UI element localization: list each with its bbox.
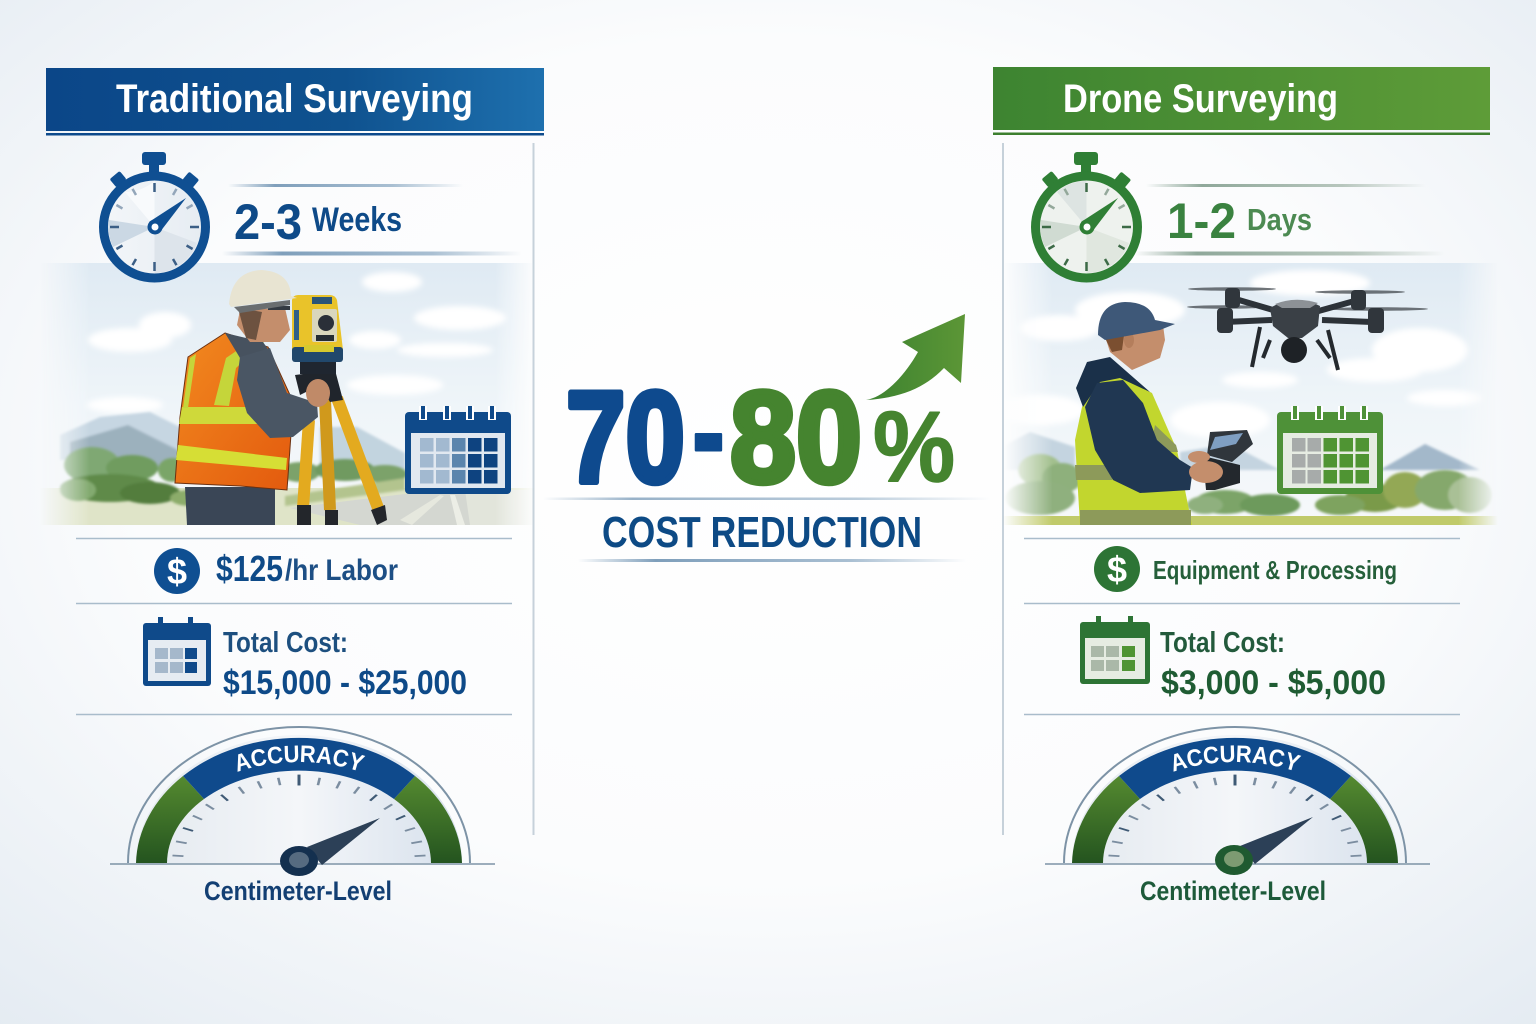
icon: calendar <box>1277 406 1383 494</box>
total cost <box>143 617 467 702</box>
headline: 70-80% <box>566 358 955 510</box>
labor rate: /hr Labor <box>285 554 398 587</box>
total cost: $3,000 - $5,000 <box>1161 664 1386 702</box>
tripod and total station <box>292 295 387 525</box>
time: 1-2 days: Days <box>1247 202 1312 237</box>
gauge: accuracy <box>110 726 495 906</box>
headline: 70-80%: % <box>873 391 955 503</box>
headline: 70-80%: 70 <box>566 364 685 510</box>
panel: central savings callout <box>543 314 990 562</box>
time: 1-2 days: 1-2 <box>1167 193 1236 249</box>
equipment and processing <box>1094 546 1397 592</box>
gauge: accuracy: ACCURACY <box>1174 745 1302 772</box>
icon: calendar <box>405 406 511 494</box>
gauge: accuracy <box>1045 726 1430 906</box>
time: 2-3 weeks: 2-3 <box>234 194 302 250</box>
total cost <box>1080 616 1386 702</box>
labor rate: $ <box>167 551 187 592</box>
gauge: accuracy: Centimeter-Level <box>204 876 392 906</box>
time: 2-3 weeks: Weeks <box>312 201 402 239</box>
equipment and processing: $ <box>1107 549 1127 590</box>
gauge: accuracy: ACCURACY <box>238 746 366 772</box>
arrow: upward trend <box>866 314 965 400</box>
time: 1-2 days <box>1167 193 1312 249</box>
labor rate: $125 <box>216 548 283 589</box>
scene: landscape, operator and drone <box>995 263 1498 525</box>
heading: traditional surveying <box>46 68 544 136</box>
operator <box>1075 302 1253 525</box>
heading: traditional surveying: Traditional Surveying <box>116 77 473 121</box>
heading: drone surveying: Drone Surveying <box>1063 77 1338 121</box>
headline: 70-80%: 80 <box>730 364 862 510</box>
icon: stopwatch <box>104 152 206 278</box>
panel: drone surveying <box>993 67 1496 906</box>
heading: drone surveying <box>993 67 1490 135</box>
total cost: Total Cost: <box>223 627 348 659</box>
headline: 70-80%: - <box>692 358 725 504</box>
total cost: Total Cost: <box>1160 627 1285 659</box>
icon: stopwatch <box>1036 152 1138 278</box>
equipment and processing: Equipment & Processing <box>1153 555 1397 585</box>
time: 2-3 weeks <box>234 194 402 250</box>
gauge: accuracy: Centimeter-Level <box>1140 876 1326 906</box>
drone <box>1187 287 1428 370</box>
surveyor <box>175 270 330 525</box>
label: cost reduction: COST REDUCTION <box>602 508 922 557</box>
panel: traditional surveying <box>46 68 544 906</box>
total cost: $15,000 - $25,000 <box>223 664 467 702</box>
scene: landscape and surveyor <box>40 263 535 525</box>
labor rate <box>154 548 398 594</box>
